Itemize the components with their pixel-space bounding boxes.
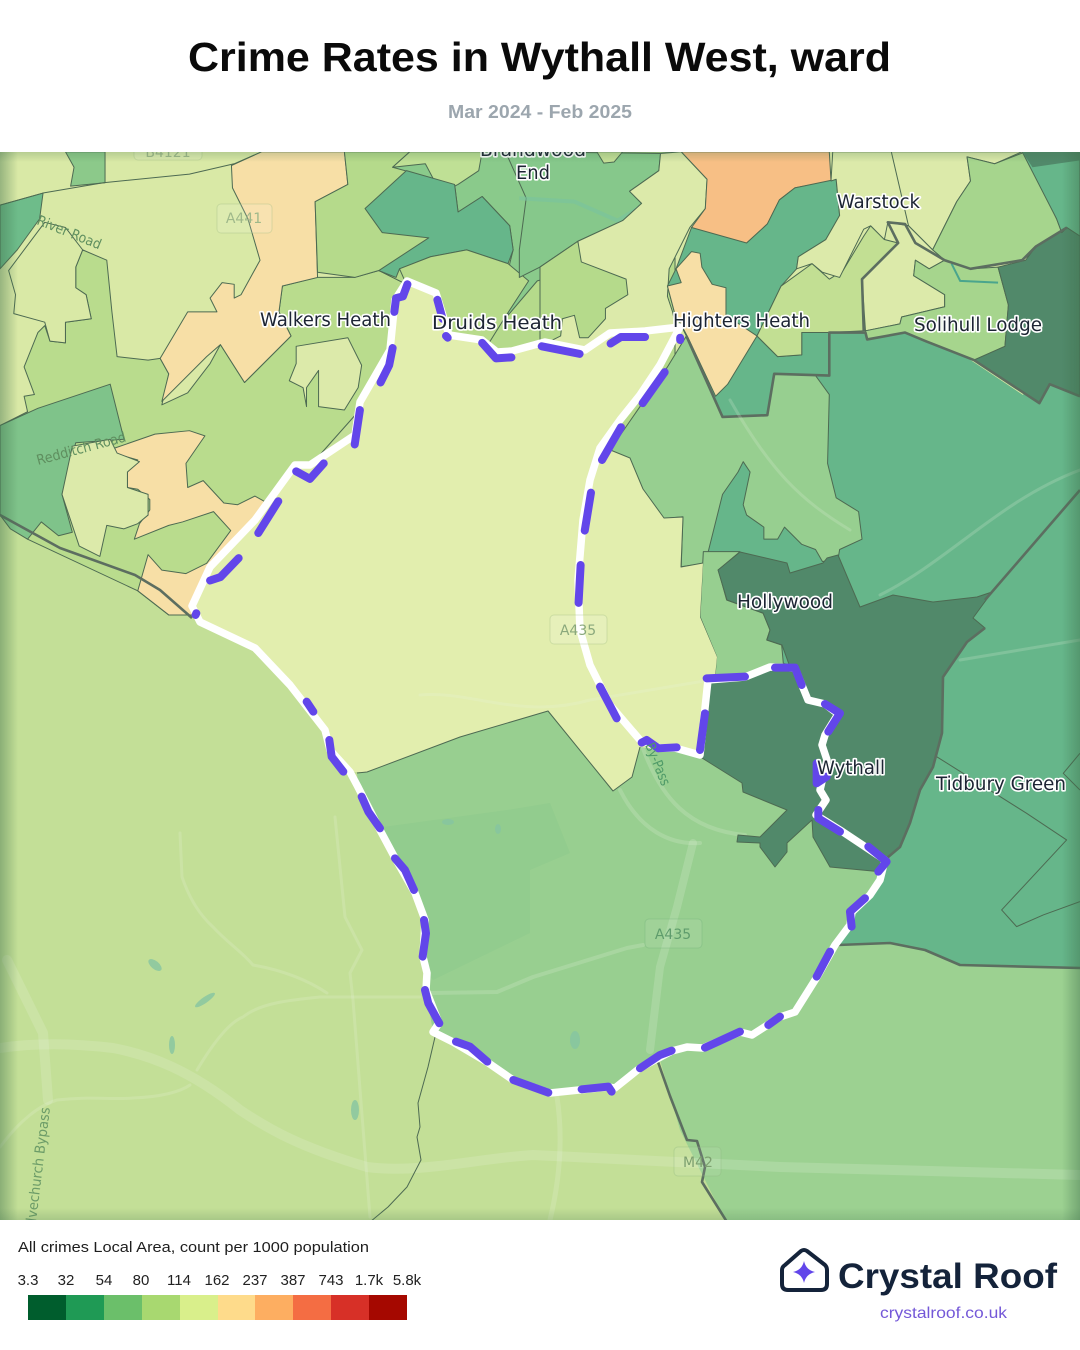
darker field patch: [383, 803, 570, 980]
bottom right area: [660, 943, 1080, 1220]
legend values: 5.8k: [393, 1272, 422, 1289]
wordmark: Crystal Roof: [838, 1257, 1057, 1296]
dark upper right: [974, 227, 1080, 403]
mid green north: [392, 152, 540, 316]
B4121 road shield: [134, 140, 202, 161]
legend values: 114: [167, 1272, 191, 1289]
Tidbury Green: Tidbury Green: [935, 774, 1066, 795]
ward outline purple dashes: [196, 284, 887, 1093]
river: [952, 264, 998, 283]
A441 road shield: [217, 204, 272, 233]
light north of solihull lodge: [862, 222, 945, 331]
green solihull lodge: [865, 260, 1008, 360]
icon: house with star: [782, 1250, 827, 1290]
Highters Heath: Highters Heath: [673, 311, 810, 332]
website url: crystalroof.co.uk: [880, 1305, 1008, 1322]
Walkers Heath: Walkers Heath: [260, 310, 391, 331]
legend values: 32: [58, 1272, 74, 1289]
legend values: 387: [280, 1272, 306, 1289]
upper north boundary line: [0, 152, 262, 205]
druids heath green: [400, 250, 529, 343]
legend values: 3.3: [18, 1272, 38, 1289]
east dark green area: [681, 327, 1080, 968]
B4121 road shield: B4121: [145, 145, 191, 161]
M42 road shield: M42: [683, 1155, 713, 1171]
hollywood mid green: [700, 552, 797, 680]
A435 road shield south: [645, 919, 702, 948]
legend values: 162: [204, 1272, 230, 1289]
A441 road shield: A441: [226, 211, 262, 227]
legend values: 1.7k: [355, 1272, 384, 1289]
Wythall By-Pass label: By-Pass: [641, 741, 673, 788]
River Road label: River Road: [35, 213, 104, 253]
top peach district: [160, 152, 348, 401]
footer background: [0, 1220, 1080, 1350]
Alvechurch Bypass label: lvechurch Bypass: [24, 1106, 54, 1222]
ward outline white: [192, 281, 885, 1093]
mid green south of highters heath: [605, 336, 862, 567]
warstock light: [797, 152, 1022, 277]
Warstock: Warstock: [837, 192, 920, 213]
Wythall: Wythall: [817, 758, 885, 779]
green centre north: [540, 241, 628, 346]
M42 road shield: [674, 1147, 721, 1176]
west green district: [0, 250, 406, 615]
Hollywood: Hollywood: [737, 592, 833, 613]
green top east: [933, 152, 1062, 269]
header background: [0, 0, 1080, 152]
logo: Crystal Roof: [782, 1250, 1057, 1322]
Druids Heath: Druids Heath: [432, 313, 562, 334]
top strip green: [65, 152, 105, 186]
canal: [520, 196, 638, 222]
water bits: [146, 819, 580, 1120]
title: Crime Rates in Wythall West, ward: [188, 34, 891, 80]
peach highters heath: [667, 252, 757, 396]
place labels: End: [516, 163, 550, 184]
yellow ward part: [192, 281, 717, 791]
orange district: [681, 152, 831, 250]
base lime area: [0, 417, 724, 1220]
green far upper right: [1022, 152, 1080, 236]
top left green wedge: [0, 193, 43, 269]
boundary lines around the ward: [0, 490, 1080, 1222]
Brandwood End: Brandwood: [480, 140, 586, 161]
Redditch Road label: Redditch Road: [35, 430, 128, 469]
top west districts: [0, 152, 675, 615]
green south of warstock: [757, 226, 898, 357]
peach lower district: [110, 431, 270, 615]
legend values: 237: [242, 1272, 268, 1289]
legend values: [18, 1272, 422, 1289]
south green ward part: [357, 711, 885, 1093]
legend values: 80: [133, 1272, 149, 1289]
top centre green: [314, 152, 676, 427]
dark green north: [365, 171, 513, 277]
top east districts: [506, 152, 1080, 567]
map edge vignette: [0, 152, 1080, 1220]
dark top right corner: [1022, 152, 1080, 167]
light lower district: [62, 439, 148, 556]
lighter top patch: [392, 152, 482, 186]
thick boundary lines: [686, 333, 1080, 417]
A435 road shield north: A435: [560, 623, 596, 639]
wythall dark polygon: [702, 552, 992, 872]
A435 road shield south: A435: [655, 927, 691, 943]
legend title: All crimes Local Area, count per 1000 population: [18, 1239, 369, 1256]
light centre north: [540, 152, 707, 357]
faint roads: [0, 400, 1080, 1220]
Solihull Lodge: Solihull Lodge: [914, 315, 1042, 336]
dark green centre: [667, 179, 840, 417]
small light top patch: [597, 152, 623, 163]
light centre west: [9, 222, 91, 343]
road labels: [24, 140, 721, 1222]
date range subtitle: Mar 2024 - Feb 2025: [448, 102, 632, 122]
legend: [18, 1239, 422, 1320]
legend values: 743: [318, 1272, 344, 1289]
north west light area: [0, 152, 1027, 424]
light walkers heath district: [289, 338, 362, 410]
wythall district surrounds: [700, 552, 1080, 927]
left green district: [0, 384, 124, 539]
legend values: 54: [96, 1272, 112, 1289]
A435 road shield north: [550, 615, 607, 644]
legend colour scale: [28, 1295, 407, 1320]
mid green upper centre: [506, 152, 661, 277]
place labels: [260, 140, 1066, 795]
